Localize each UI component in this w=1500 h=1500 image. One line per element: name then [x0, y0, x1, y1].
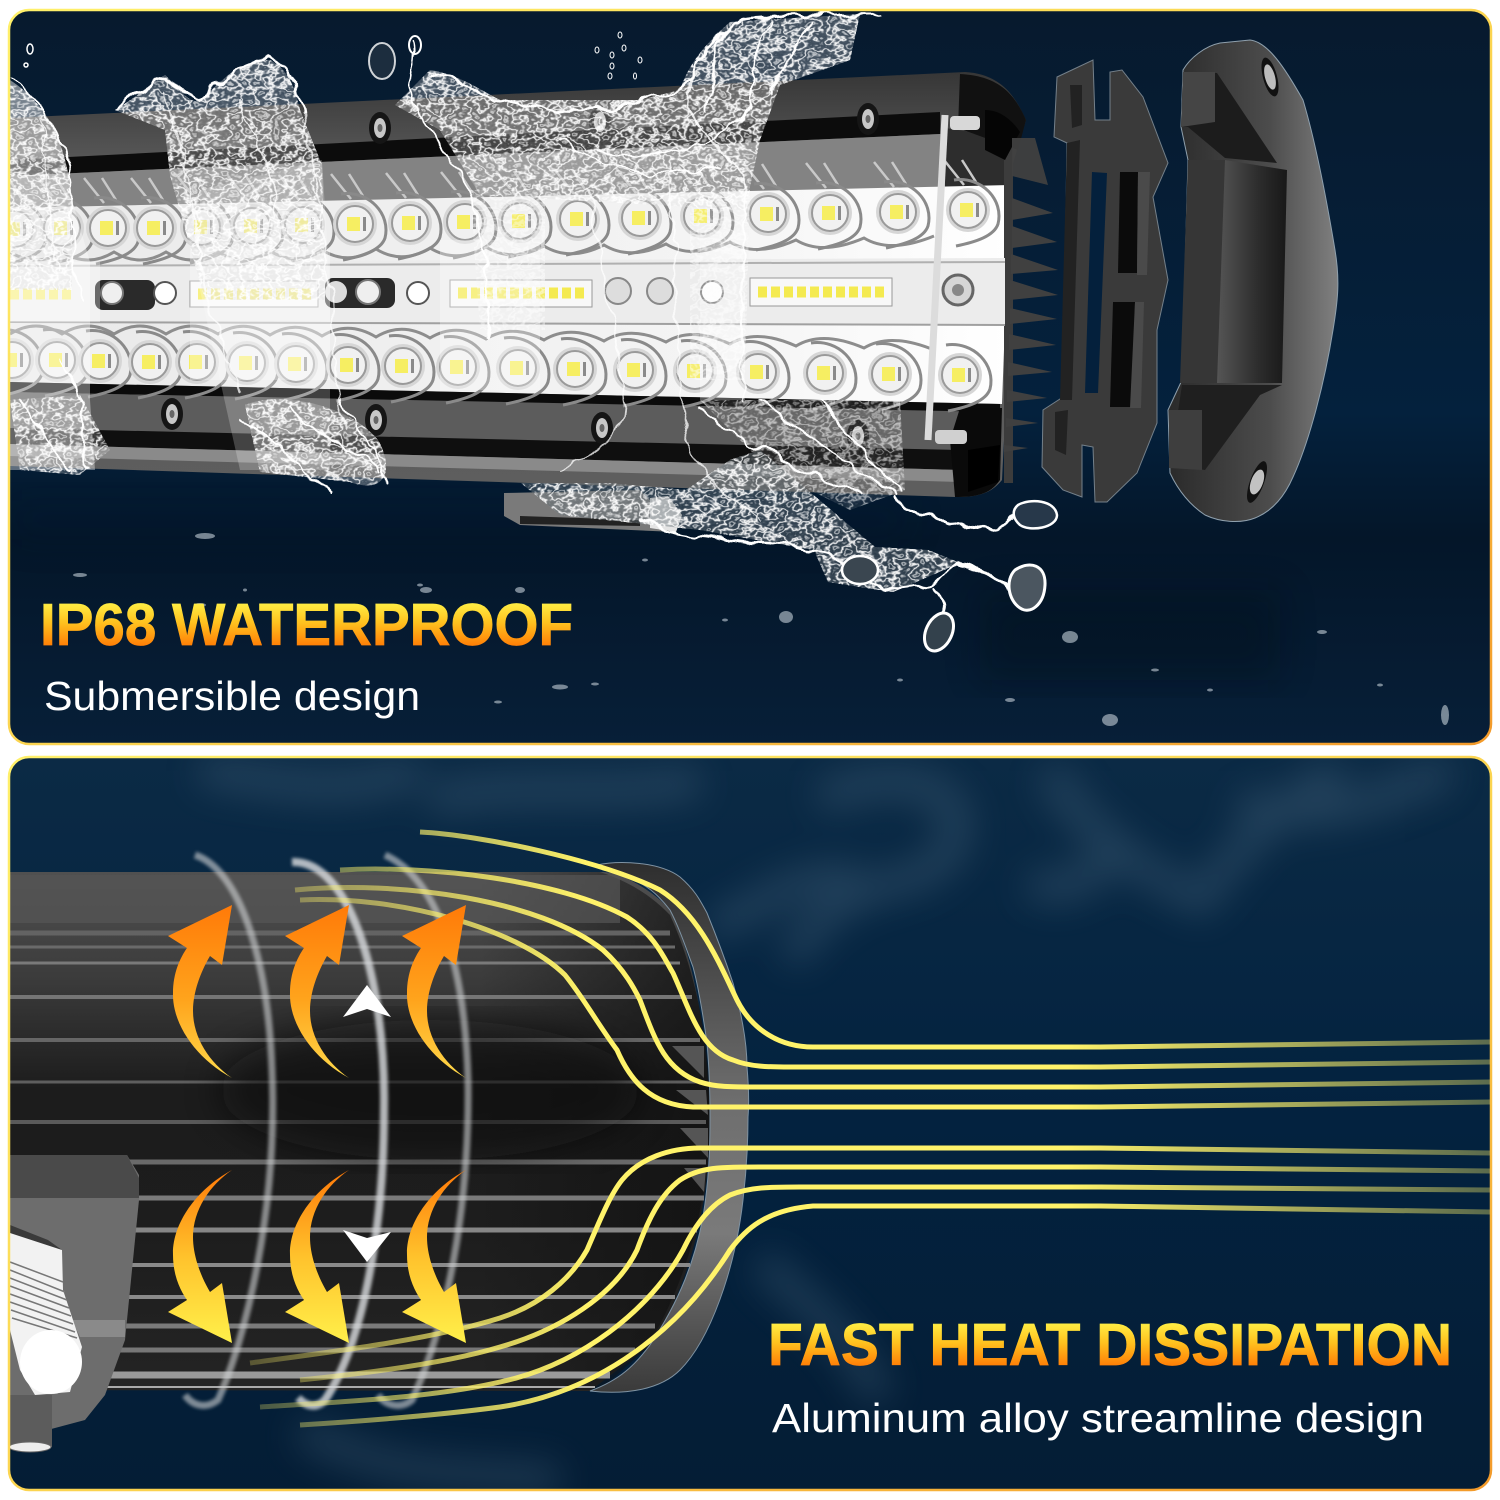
centre strip of small LEDs: [10, 278, 892, 307]
cooling fins: [1004, 138, 1058, 452]
orange up arrows: [168, 905, 466, 1078]
panel border: heat dissipation: [9, 757, 1491, 1490]
fin lines: [10, 933, 706, 1387]
reflection on the dark floor: [990, 618, 1270, 672]
vent wedges: [672, 1046, 708, 1192]
lower housing stripes: [10, 382, 1000, 412]
light bar body: [10, 72, 1026, 497]
subheading: submersible design: Submersible design: [44, 673, 420, 719]
heat sink bar: [10, 863, 749, 1392]
dark smoke patch on bar: [220, 1020, 640, 1160]
centre strip connectors: [95, 275, 973, 310]
airflow rings: [185, 855, 468, 1406]
scalloped lens outlines: [10, 236, 934, 350]
loose threaded bolt: [504, 490, 682, 532]
white arrowheads on centre ring: [343, 985, 391, 1262]
smoke background: [200, 770, 1450, 1480]
panel border: waterproof: [9, 10, 1491, 744]
panel: IP68 waterproof: [0, 10, 1491, 744]
water: milky translucent film over the bar: [10, 80, 745, 470]
end of bar: glass edge and pins: [928, 110, 1020, 492]
mounting bracket and bolt: [9, 1155, 139, 1452]
housing screws: [161, 103, 879, 452]
heat flow lines: upper: [295, 832, 1490, 1107]
middle end bracket: [1042, 60, 1168, 502]
water: foamy splash regions: [10, 14, 960, 592]
subheading: aluminum alloy streamline design: Aluminum alloy streamline design: [772, 1395, 1424, 1441]
panel: fast heat dissipation: [9, 757, 1491, 1490]
bottom row of LEDs: [0, 330, 991, 411]
middle strip: [745, 258, 1005, 324]
water: wavy highlight strokes: [10, 14, 1035, 620]
outer end cap: [1168, 40, 1338, 522]
end cap rim: [590, 863, 749, 1392]
water droplets and bubbles: [24, 32, 1057, 656]
top row of LEDs: [0, 160, 999, 265]
upper housing stripes: [10, 112, 940, 176]
heading: IP68 waterproof: IP68 WATERPROOF: [40, 592, 573, 658]
small scattered bubbles: [73, 533, 1449, 726]
inner end darkening: [519, 872, 710, 1390]
yellow down arrows: [168, 1170, 466, 1343]
white led panel: [10, 185, 1010, 404]
heat flow lines: lower: [250, 1148, 1490, 1425]
heading: fast heat dissipation: FAST HEAT DISSIPATION: [768, 1312, 1452, 1378]
